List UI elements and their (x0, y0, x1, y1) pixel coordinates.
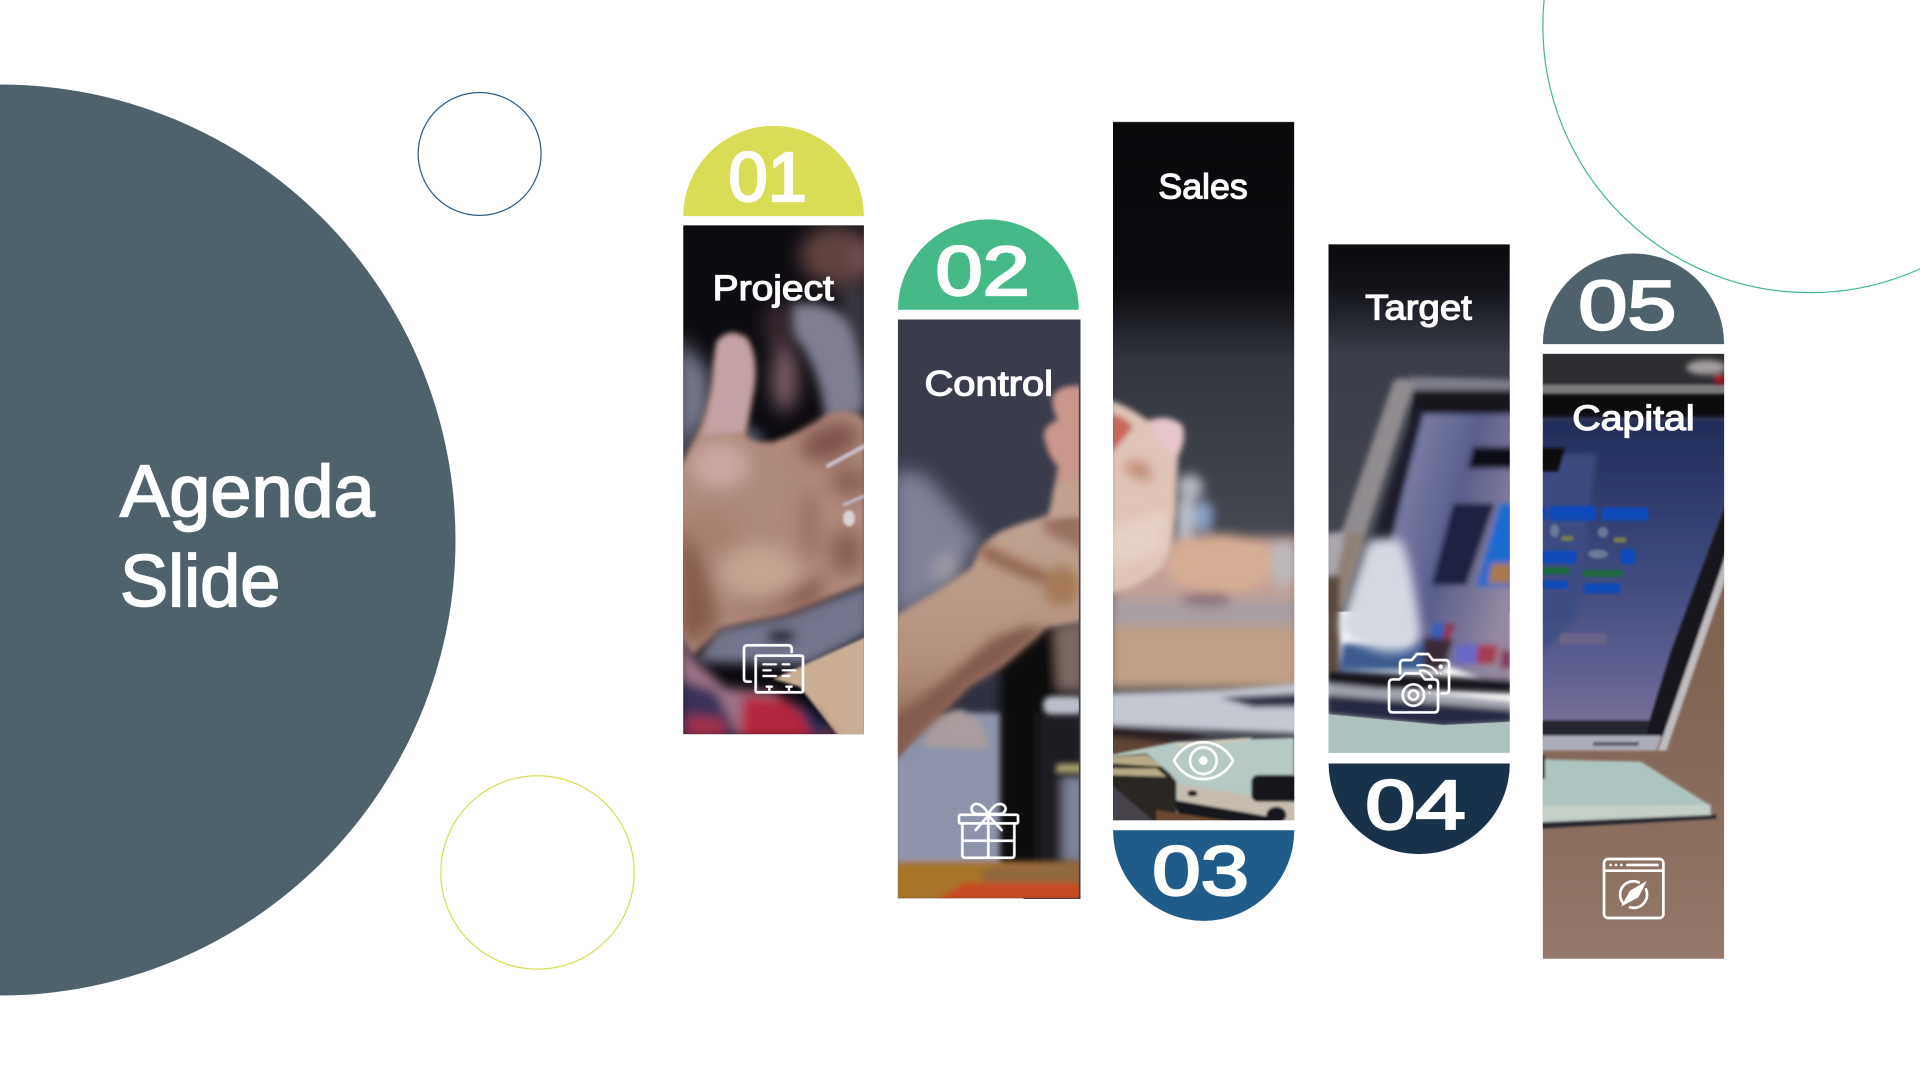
photo strip 1 (676, 222, 875, 738)
photo strip 5 (1540, 351, 1730, 964)
number cap 02: 02 (936, 232, 1030, 310)
label Target: Target (1365, 288, 1472, 328)
label Sales: Sales (1158, 166, 1248, 206)
icon: eye (1174, 742, 1233, 779)
outline circle: yellow (441, 776, 634, 969)
title: Agenda Slide: Agenda (120, 450, 375, 533)
panel: 05 Capital (1540, 253, 1730, 964)
number cap 04 (1329, 763, 1510, 854)
big dark circle (0, 85, 456, 996)
outline circle: navy (418, 92, 541, 215)
number cap 02 (898, 219, 1079, 310)
number cap 04: 04 (1365, 766, 1466, 844)
number cap 03 (1113, 830, 1294, 921)
icon: browser compass (1604, 859, 1663, 918)
icon: gift box (959, 804, 1018, 858)
photo strip 3 (1110, 122, 1300, 825)
icon: slides board (744, 645, 803, 692)
number cap 05 (1543, 253, 1724, 344)
label Project: Project (713, 268, 834, 308)
icon: cameras (1389, 654, 1449, 712)
label Capital: Capital (1572, 398, 1695, 438)
number cap 01: 01 (729, 138, 807, 216)
panel: 04 Target (1325, 244, 1513, 854)
panel: 03 Sales (1110, 122, 1300, 921)
title: Agenda Slide: Slide (120, 539, 280, 622)
number cap 05: 05 (1578, 266, 1676, 344)
number cap 03: 03 (1152, 832, 1249, 910)
title: Agenda Slide (120, 450, 375, 622)
label Control: Control (924, 364, 1053, 404)
panel: 01 Project (676, 126, 875, 738)
outline circle: green (1543, 0, 1920, 293)
photo strip 4 (1325, 244, 1513, 755)
panel: 02 Control (891, 219, 1086, 903)
photo strip 2 (891, 316, 1086, 903)
number cap 01 (683, 126, 864, 216)
